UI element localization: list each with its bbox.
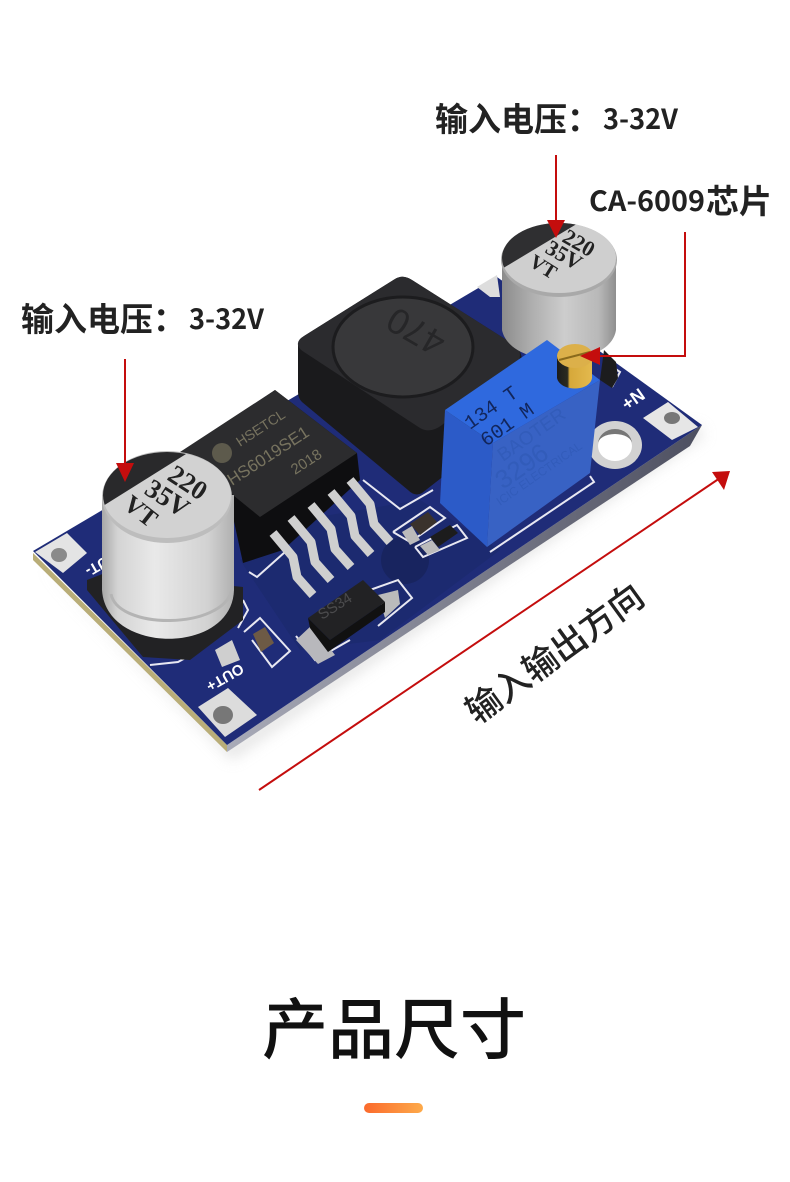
regulator chip <box>180 390 390 595</box>
regulator chip: HSETCL <box>233 406 288 450</box>
label: chip: CA-6009 <box>589 180 705 220</box>
small SMD parts <box>410 512 437 535</box>
capacitor: left: 220 <box>163 459 213 506</box>
potentiometer: 134 T <box>461 382 523 436</box>
arrow: in-out direction <box>259 471 730 790</box>
label: input voltage top <box>435 93 679 141</box>
inductor: 470 <box>379 299 452 365</box>
board shadow <box>40 425 705 760</box>
circuit board <box>33 200 705 760</box>
regulator chip: HS6019SE1 <box>224 422 313 489</box>
board base <box>33 277 702 752</box>
potentiometer: 3296 <box>489 437 554 495</box>
title accent bar <box>364 1103 423 1113</box>
diode SS34: SS34 <box>315 590 355 623</box>
arrow: input voltage top <box>547 155 565 238</box>
solder pad: OUT+ <box>198 688 257 737</box>
title: 产品尺寸 <box>262 977 526 1073</box>
capacitor chip lower <box>253 627 274 652</box>
solder pad: OUT- <box>35 533 87 573</box>
solder pad: +IN <box>643 402 698 440</box>
board label: +IN: +N <box>618 384 649 414</box>
label: input voltage left <box>21 293 265 341</box>
diode SS34 <box>296 580 400 664</box>
capacitor base <box>600 350 618 388</box>
capacitor: right <box>501 223 618 388</box>
capacitor: left: 35V <box>140 473 195 524</box>
label: input voltage left: 输入电压： <box>21 293 186 341</box>
potentiometer: BAOTER <box>494 404 570 466</box>
capacitor: left <box>87 430 243 660</box>
regulator chip: 2018 <box>288 446 325 478</box>
label: chip: 芯片 <box>706 175 772 223</box>
potentiometer: ICIC ELECTRICAL <box>494 439 585 508</box>
label: chip <box>589 175 772 223</box>
chip pins <box>273 480 390 595</box>
capacitor: right: 220 <box>558 224 600 262</box>
label: input voltage top: 输入电压： <box>435 93 600 141</box>
capacitor: left: VT <box>118 490 163 533</box>
potentiometer: 601 M <box>477 399 539 453</box>
capacitor: right: VT <box>525 251 561 284</box>
small components <box>215 512 458 667</box>
board label: OUT-: UT- <box>82 553 112 579</box>
capacitor: right: 35V <box>542 235 587 275</box>
silkscreen outlines <box>150 362 620 667</box>
adjustment screw <box>557 344 593 388</box>
label: input voltage left: 3-32V <box>189 298 265 338</box>
solder pad: top <box>477 275 500 297</box>
arrow: input voltage left <box>116 359 134 482</box>
board label: OUT+: OUT+ <box>203 660 246 695</box>
inductor <box>298 277 522 494</box>
potentiometer <box>440 340 600 547</box>
mounting hole <box>588 421 642 469</box>
label: in-out direction: 输入输出方向 <box>453 569 653 734</box>
label: input voltage top: 3-32V <box>603 98 679 138</box>
arrow: chip <box>580 232 685 365</box>
